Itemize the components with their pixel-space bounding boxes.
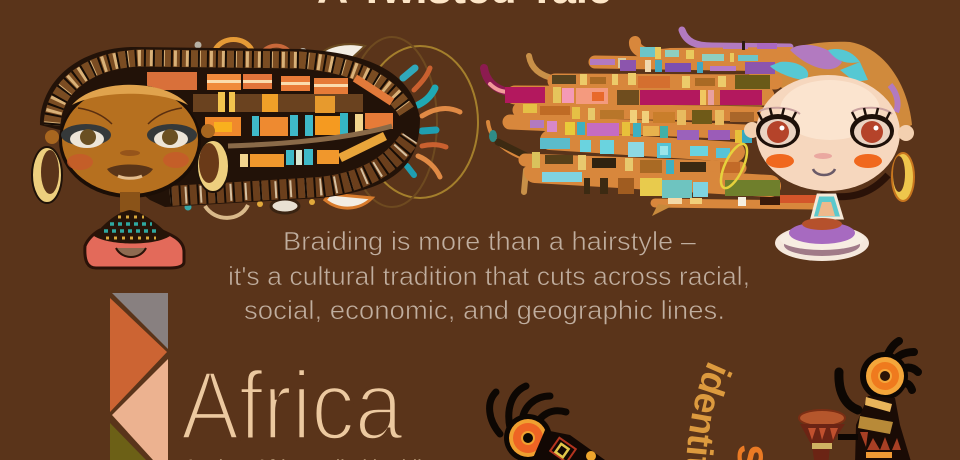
intro text: social, economic, and geographic lines. <box>244 295 725 325</box>
intro text: it's a cultural tradition that cuts across racial, <box>228 261 750 291</box>
blush, nose and mouth <box>67 154 93 170</box>
hair weave bricks <box>147 72 393 167</box>
face <box>59 84 201 198</box>
hair bricks <box>489 41 898 216</box>
heading: Africa: Africa <box>181 351 403 460</box>
hair strand tips <box>484 56 556 192</box>
hoop earrings <box>32 147 62 203</box>
hair mass <box>40 47 420 207</box>
hair cap <box>745 42 912 130</box>
intro text: Braiding is more than a hairstyle – <box>283 226 697 256</box>
icon: triangle tile column <box>110 293 168 460</box>
icon: tribal figure left <box>490 386 612 460</box>
neck and bust <box>812 195 842 218</box>
illustration: African braided woman <box>32 37 478 268</box>
hair tips <box>403 68 460 177</box>
braid stripes <box>52 58 410 196</box>
hoop earring <box>892 153 914 201</box>
eyes and lashes <box>756 114 800 148</box>
icon: tribal figure with drum <box>799 341 918 460</box>
hair ornaments <box>184 37 478 218</box>
necklace and bust <box>120 192 140 212</box>
blush, nose and mouth <box>766 154 794 168</box>
eyes <box>61 124 111 146</box>
hair strands <box>510 30 815 205</box>
intro text <box>228 226 750 325</box>
illustration: colourful braided girl <box>484 30 914 261</box>
face <box>756 75 900 191</box>
